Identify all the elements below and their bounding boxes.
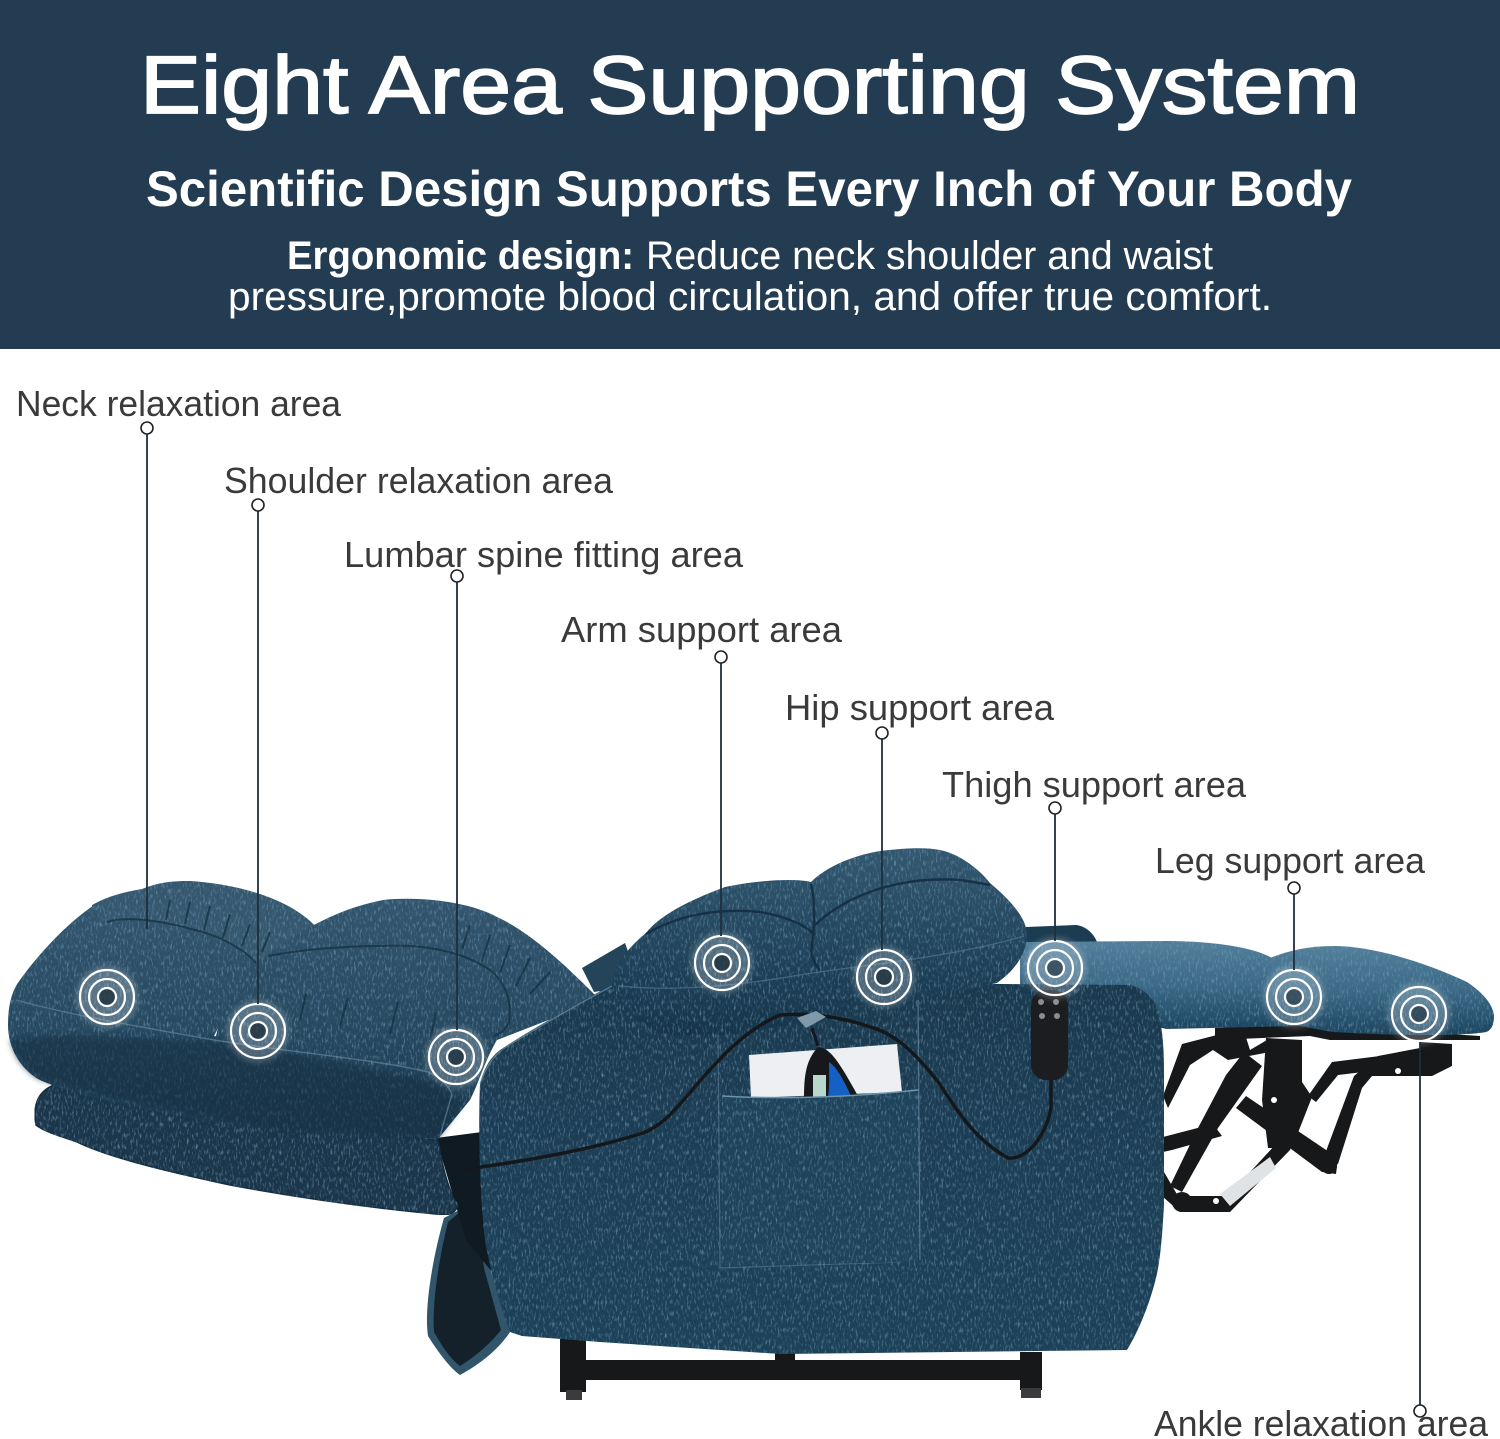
cushion seams	[16, 1000, 452, 1136]
callout: lumbar	[344, 534, 744, 1030]
fabric wrinkles	[107, 900, 550, 1040]
seat and leg rest	[1020, 925, 1494, 1035]
recliner chair illustration	[8, 848, 1494, 1400]
seat cushion	[1020, 941, 1300, 1029]
callout: hip	[785, 687, 1055, 950]
dark gap and back flap	[427, 1132, 510, 1375]
paper booklet	[749, 1044, 902, 1098]
callout: thigh	[942, 764, 1247, 941]
callout labels and leader lines	[16, 383, 1489, 1439]
lower cushion shadow	[10, 1036, 462, 1139]
callout: ankle	[1154, 1042, 1489, 1439]
body piping and seams	[480, 986, 920, 1268]
hand controller	[1031, 990, 1068, 1080]
armrest cup holder back	[1026, 925, 1097, 945]
leg rest cushion	[1270, 946, 1494, 1035]
base frame	[560, 1338, 1042, 1400]
back cushion	[216, 899, 600, 1139]
wedge behind arm	[582, 943, 640, 992]
cable clip	[797, 1011, 826, 1028]
header band	[0, 0, 1500, 349]
callout: arm: Arm support area	[561, 609, 843, 650]
callout: neck: Neck relaxation area	[16, 383, 342, 424]
storage pocket with items	[722, 1044, 918, 1266]
callout: hip: Hip support area	[785, 687, 1055, 728]
power cable	[466, 1014, 1051, 1169]
ring: arm	[691, 932, 753, 994]
callout: shoulder	[224, 460, 614, 1004]
arm pillow	[612, 848, 1027, 1035]
subtitle: Scientific Design Supports Every Inch of Your Body	[146, 161, 1352, 217]
description line two: pressure,promote blood circulation, and offer true comfort.	[228, 275, 1272, 319]
massage target rings	[76, 932, 1450, 1088]
callout: shoulder: Shoulder relaxation area	[224, 460, 614, 501]
side body panel	[479, 983, 1164, 1354]
callout: leg	[1155, 840, 1426, 970]
head cushion rear	[92, 881, 316, 975]
ring: ankle	[1388, 983, 1450, 1045]
title: Eight Area Supporting System	[140, 40, 1360, 131]
ring: thigh	[1024, 937, 1086, 999]
callout: leg: Leg support area	[1155, 840, 1426, 881]
description line one: Reduce neck shoulder and waist	[646, 234, 1213, 278]
ring: hip	[853, 946, 915, 1008]
description line one: Ergonomic design:	[287, 234, 634, 278]
callout: neck	[16, 383, 342, 929]
arm pillow creases	[646, 879, 990, 970]
lower back panel	[35, 1085, 458, 1215]
pocket flap	[722, 1090, 918, 1266]
callout: lumbar: Lumbar spine fitting area	[344, 534, 744, 575]
callout: arm	[561, 609, 843, 936]
head cushion front	[8, 905, 438, 1139]
mechanism warning label	[1220, 1157, 1276, 1206]
tv remote	[804, 1047, 858, 1098]
description line one	[287, 234, 1213, 278]
footrest mechanism	[1162, 1024, 1480, 1212]
callout: thigh: Thigh support area	[942, 764, 1247, 805]
ring: leg	[1263, 966, 1325, 1028]
ring: lumbar	[425, 1026, 487, 1088]
ring: shoulder	[227, 1000, 289, 1062]
ring: neck	[76, 966, 138, 1028]
